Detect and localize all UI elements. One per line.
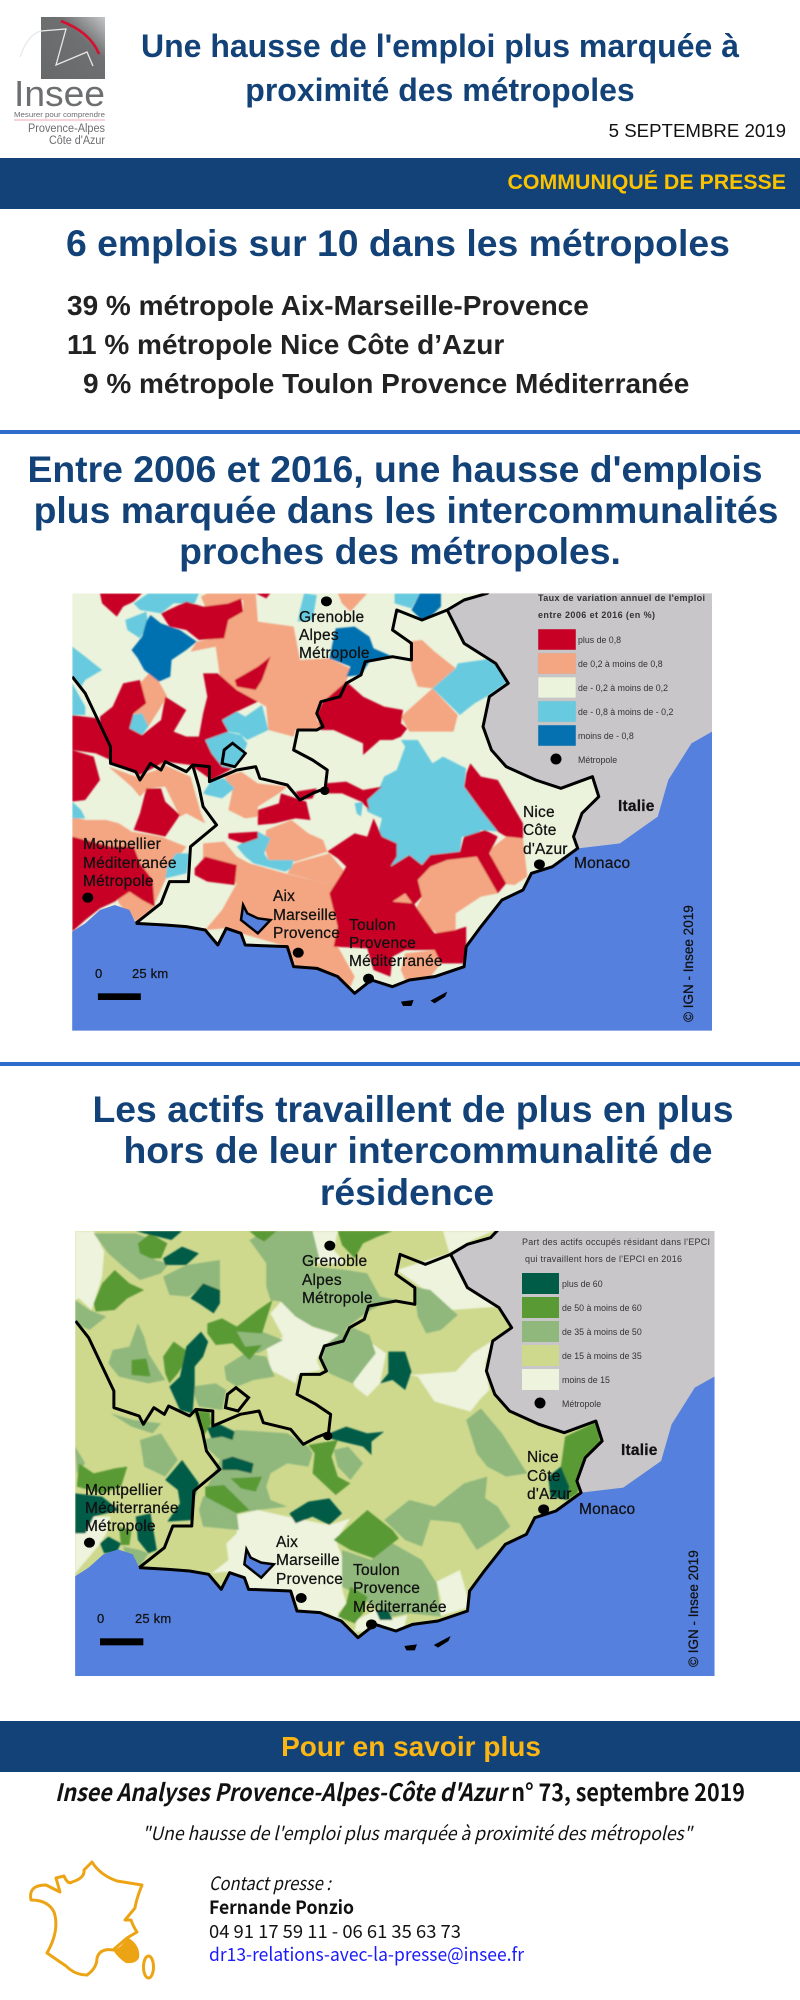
banner: communiqué de presse: COMMUNIQUÉ DE PRESSE <box>508 169 786 194</box>
list of metropolis shares <box>67 290 689 399</box>
map labels: Provence <box>276 1571 343 1588</box>
title <box>141 28 739 108</box>
map labels: Italie <box>618 798 655 815</box>
legend: employment change: moins de - 0,8 <box>578 731 634 741</box>
banner: pour en savoir plus <box>0 1721 800 1772</box>
map labels: Méditerranée <box>85 1500 179 1517</box>
map labels: Marseille <box>276 1552 340 1569</box>
map labels: Grenoble <box>302 1253 367 1270</box>
map labels: d'Azur <box>527 1486 572 1503</box>
title: Une hausse de l'emploi plus marquée à <box>141 28 739 64</box>
map labels <box>85 1253 701 1667</box>
legend: employment change <box>538 593 705 765</box>
date: 5 SEPTEMBRE 2019 <box>609 120 786 141</box>
title: proximité des métropoles <box>245 72 635 108</box>
map labels: Montpellier <box>85 1482 163 1499</box>
map labels: d'Azur <box>523 841 568 858</box>
map labels: © IGN - Insee 2019 <box>686 1550 701 1667</box>
map labels: Provence <box>349 935 416 952</box>
map labels: Méditerranée <box>83 855 177 872</box>
map labels: Montpellier <box>83 836 161 853</box>
banner: pour en savoir plus: Pour en savoir plus <box>281 1731 541 1762</box>
map labels: 25 km <box>132 966 168 981</box>
map labels: Provence <box>353 1580 420 1597</box>
icon: France map <box>31 1862 154 1978</box>
map: workers commuting outside EPCI <box>75 1231 715 1676</box>
legend: employment change: de - 0,8 à moins de - 0,2 <box>578 707 673 717</box>
heading: hausse d'emplois <box>27 448 778 572</box>
map: employment change <box>72 593 712 1031</box>
map labels: Méditerranée <box>353 1599 447 1616</box>
map labels: 0 <box>95 966 102 981</box>
map labels: Grenoble <box>299 609 364 626</box>
legend: commuting share <box>522 1237 710 1409</box>
map labels: Métropole <box>299 645 370 662</box>
legend: commuting share: Part des actifs occupés résidant dans l'EPCI <box>522 1237 710 1247</box>
logo: Insee: Provence-Alpes <box>28 123 105 135</box>
legend: commuting share: de 35 à moins de 50 <box>562 1327 642 1337</box>
legend: commuting share: moins de 15 <box>562 1375 610 1385</box>
list of metropolis shares: 11 % métropole Nice Côte d’Azur <box>67 329 504 360</box>
contact block <box>209 1870 525 1967</box>
map labels: Côte <box>523 822 557 839</box>
map labels: 0 <box>97 1611 104 1626</box>
heading: hausse d'emplois: plus marquée dans les intercommunalités <box>34 489 778 531</box>
map labels: Côte <box>527 1468 561 1485</box>
heading: hausse d'emplois: Entre 2006 et 2016, une hausse d'emplois <box>27 448 763 490</box>
logo: Insee: Insee <box>14 73 105 114</box>
map labels: Provence <box>273 925 340 942</box>
legend: commuting share: de 50 à moins de 60 <box>562 1303 642 1313</box>
legend: employment change: Métropole <box>578 755 617 765</box>
map labels: Toulon <box>353 1562 400 1579</box>
map labels: Aix <box>273 888 295 905</box>
map labels: Monaco <box>579 1501 635 1518</box>
map labels: Toulon <box>349 917 396 934</box>
heading: actifs: Les actifs travaillent de plus en plus <box>92 1088 734 1130</box>
heading: actifs <box>92 1088 734 1213</box>
map labels: © IGN - Insee 2019 <box>681 905 696 1022</box>
list of metropolis shares: 39 % métropole Aix-Marseille-Provence <box>67 290 589 321</box>
map labels: Monaco <box>574 855 630 872</box>
map labels: 25 km <box>135 1611 171 1626</box>
map labels: Métropole <box>83 873 154 890</box>
contact block: Contact presse : <box>209 1870 333 1896</box>
map labels: Italie <box>621 1442 658 1459</box>
logo: Insee <box>14 17 105 147</box>
map labels: Alpes <box>299 627 339 644</box>
map labels: Nice <box>523 804 555 821</box>
heading: hausse d'emplois: proches des métropoles. <box>179 530 621 572</box>
legend: commuting share: plus de 60 <box>562 1279 603 1289</box>
heading: actifs: hors de leur intercommunalité de <box>123 1129 713 1171</box>
map labels: Alpes <box>302 1272 342 1289</box>
publication reference: Insee Analyses Provence-Alpes-Côte d'Azur n° 73, septembre 2019 <box>55 1773 745 1808</box>
legend: employment change: de - 0,2 à moins de 0,2 <box>578 683 668 693</box>
list of metropolis shares: 9 % métropole Toulon Provence Méditerranée <box>83 368 689 399</box>
legend: employment change: plus de 0,8 <box>578 635 621 645</box>
contact block: Fernande Ponzio <box>209 1894 354 1920</box>
legend: commuting share: qui travaillent hors de l'EPCI en 2016 <box>525 1254 682 1264</box>
publication title quote: "Une hausse de l'emploi plus marquée à proximité des métropoles" <box>142 1820 694 1846</box>
logo: Insee: Côte d'Azur <box>49 135 105 147</box>
contact block: 04 91 17 59 11 - 06 61 35 63 73 <box>209 1918 461 1944</box>
map labels: Nice <box>527 1449 559 1466</box>
heading: 6 emplois sur 10: 6 emplois sur 10 dans les métropoles <box>66 222 730 264</box>
map labels: Marseille <box>273 907 337 924</box>
map labels: Métropole <box>302 1290 373 1307</box>
banner: communiqué de presse <box>0 158 800 209</box>
logo: Insee: Mesurer pour comprendre <box>14 110 105 119</box>
legend: commuting share: de 15 à moins de 35 <box>562 1351 642 1361</box>
map labels: Méditerranée <box>349 953 443 970</box>
legend: commuting share: Métropole <box>562 1399 601 1409</box>
heading: actifs: résidence <box>320 1171 494 1213</box>
map labels <box>83 609 696 1022</box>
contact block: dr13-relations-avec-la-presse@insee.fr <box>209 1941 525 1967</box>
legend: employment change: Taux de variation annuel de l'emploi <box>538 593 705 603</box>
map labels: Métropole <box>85 1518 156 1535</box>
legend: employment change: entre 2006 et 2016 (en %) <box>538 610 655 620</box>
legend: employment change: de 0,2 à moins de 0,8 <box>578 659 663 669</box>
map labels: Aix <box>276 1534 298 1551</box>
